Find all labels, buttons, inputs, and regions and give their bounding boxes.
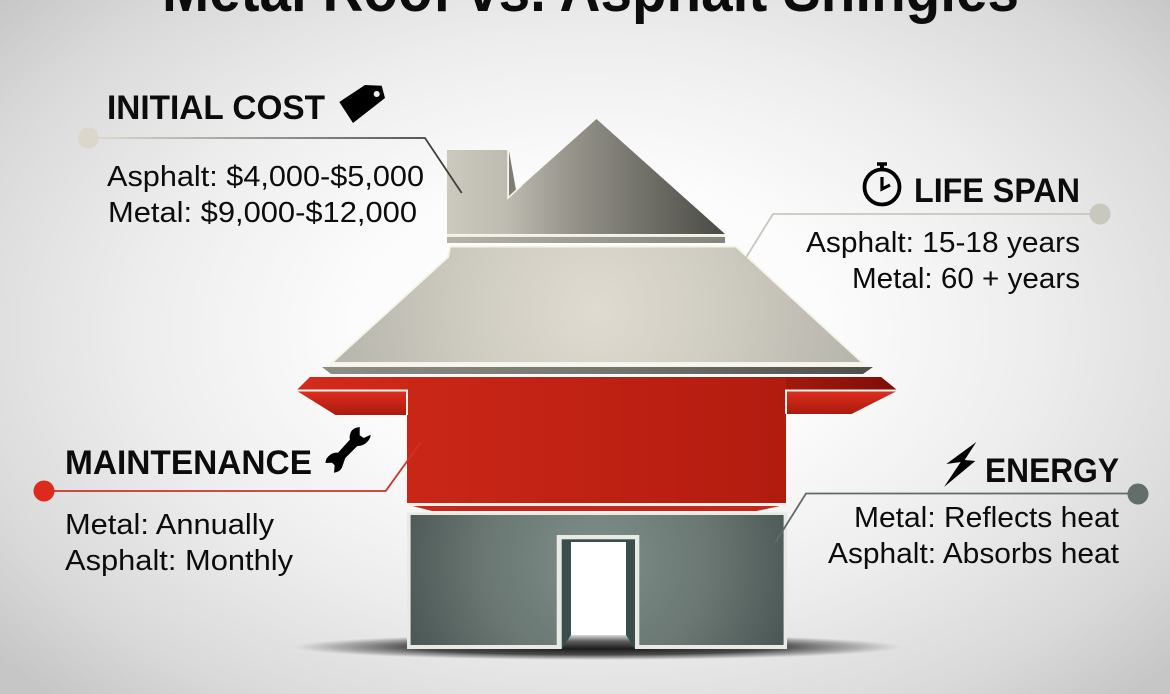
text: costs: Metal: $9,000-$12,000	[108, 197, 417, 229]
marker dot	[1128, 484, 1148, 504]
text: life spans: Metal: 60 + years	[852, 263, 1080, 295]
text: heat behavior: Asphalt: Absorbs heat	[828, 538, 1119, 570]
text: schedules: Metal: Annually	[65, 509, 275, 541]
marker dot	[1090, 204, 1110, 224]
callout: initial cost	[78, 85, 462, 229]
icon: price tag	[339, 85, 385, 123]
callout: maintenance	[34, 427, 420, 577]
marker dot	[78, 128, 99, 148]
heading: INITIAL COST	[107, 89, 325, 127]
text: costs	[107, 161, 424, 229]
connector line	[98, 138, 462, 193]
heading: LIFE SPAN	[914, 172, 1080, 210]
door	[557, 535, 639, 649]
heading: ENERGY	[985, 452, 1119, 490]
red walls and eaves	[297, 377, 897, 511]
text: life spans: Asphalt: 15-18 years	[806, 227, 1080, 259]
callout: life span	[737, 164, 1110, 295]
marker dot	[34, 480, 54, 502]
text: costs: Asphalt: $4,000-$5,000	[107, 161, 424, 193]
connector line	[775, 494, 1128, 543]
icon: stopwatch	[864, 164, 900, 204]
connector line	[737, 214, 1090, 272]
heading: MAINTENANCE	[65, 444, 312, 482]
upper gable roof with chimney	[447, 119, 725, 243]
ground shadow	[292, 634, 902, 660]
gray base with door	[407, 512, 787, 649]
text: heat behavior	[828, 502, 1119, 570]
callout: energy	[775, 442, 1148, 570]
text: schedules	[65, 509, 294, 577]
connector line	[54, 443, 420, 491]
icon: lightning bolt	[944, 442, 976, 487]
middle roof	[322, 246, 873, 374]
text: schedules: Asphalt: Monthly	[65, 545, 294, 577]
text: heat behavior: Metal: Reflects heat	[854, 502, 1119, 534]
icon: wrench	[326, 427, 371, 473]
text: life spans	[806, 227, 1080, 295]
house illustration	[292, 119, 902, 660]
